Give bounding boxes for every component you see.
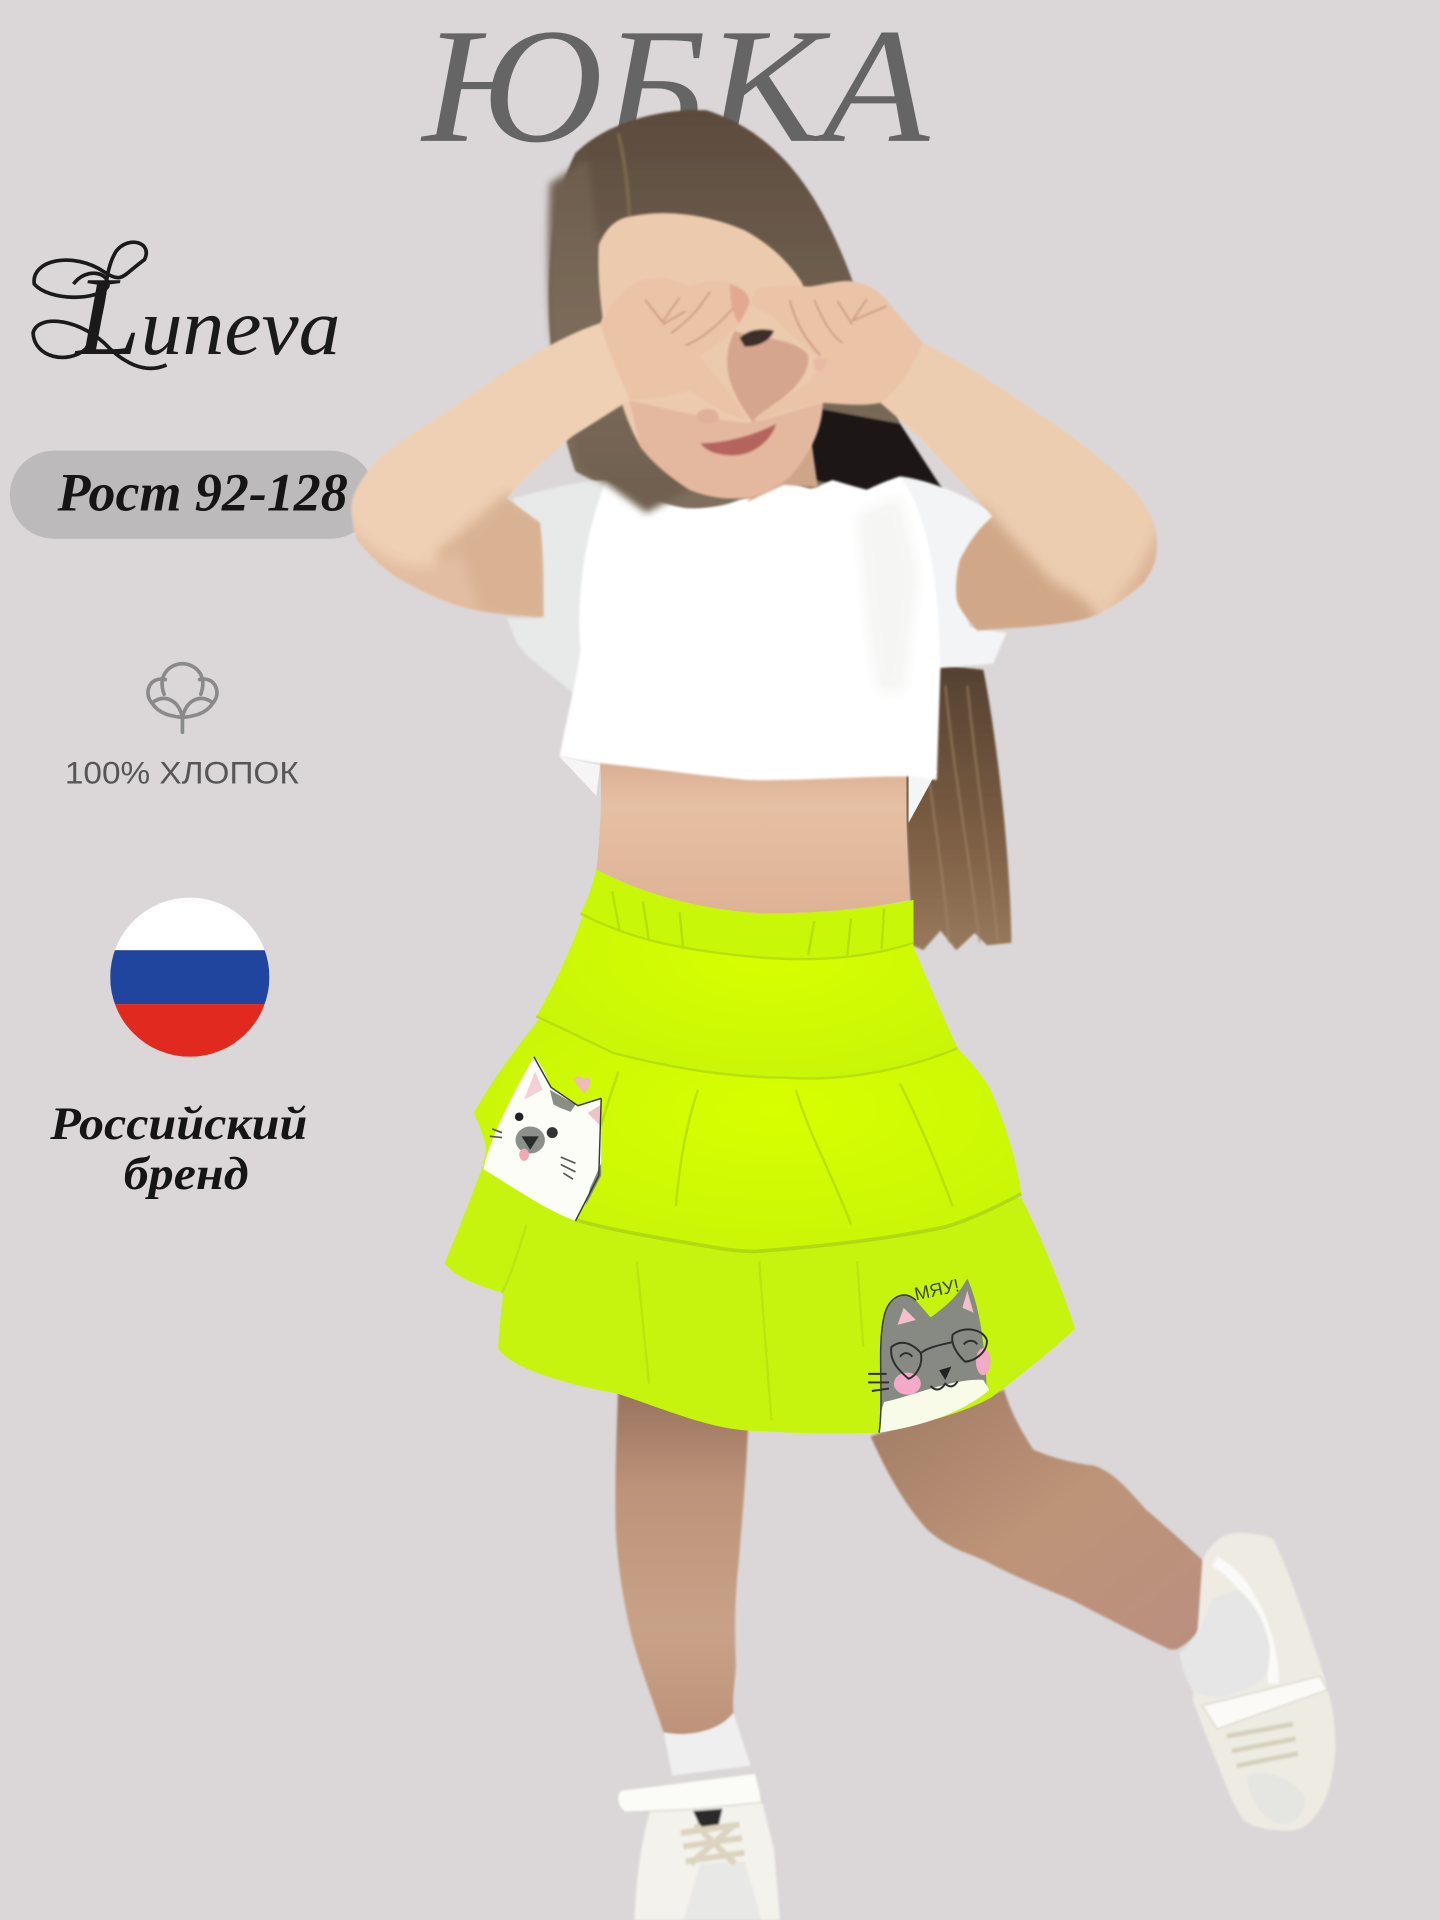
skirt [444,869,1075,1434]
logo wordmark: Luneva [74,255,340,379]
legs [615,1384,1212,1734]
face and neck [598,133,823,502]
hair parting [618,133,629,217]
logo flourish [33,242,167,368]
lips [700,424,776,456]
back hair and head [549,110,943,514]
white t-shirt [507,476,1007,780]
front hair strand [548,159,689,513]
right leg [871,1390,1212,1649]
height pill [10,451,375,539]
cat print: gray cat with glasses [868,1274,991,1433]
right shoe [1193,1533,1335,1831]
lower tier [444,1167,1075,1434]
eye [740,329,774,347]
right hand [752,281,923,420]
girl figure [343,110,1335,1920]
midriff [596,759,910,913]
shirt back hem [560,757,937,823]
label: russian brand: Российский [49,1099,307,1150]
pill label: Рост 92-128 [57,463,348,523]
label: 100% cotton: 100% ХЛОПОК [65,755,299,791]
right sleeve [900,476,1007,669]
left arm [350,322,624,618]
nose [697,409,719,424]
shirt body [560,476,940,780]
icon: cotton boll [148,664,217,732]
left sleeve [507,480,637,693]
right sock [1179,1589,1270,1697]
icon: russian flag [110,898,269,1057]
label: russian brand: бренд [124,1149,249,1200]
cat print: white cat [484,1057,601,1221]
brand logo: Luneva [33,242,340,379]
pill background [10,451,375,539]
right arm and hand [752,281,1163,637]
label: russian brand [49,1099,307,1200]
upper tier [474,1016,1021,1251]
neck [747,437,818,502]
skirt folds [502,891,1021,1420]
left leg [615,1384,748,1734]
heart opening cheek [727,331,808,422]
right arm [876,337,1163,637]
cat caption: МЯУ! [912,1274,961,1304]
left sock [664,1713,751,1776]
left hand [600,278,749,420]
long hair behind [906,661,1011,950]
left shoe [618,1773,780,1920]
yoke and waistband [536,869,958,1079]
face [598,213,823,499]
left arm and hand [343,278,749,624]
lower face shade [629,400,823,499]
title: ЮБКА [420,0,930,177]
